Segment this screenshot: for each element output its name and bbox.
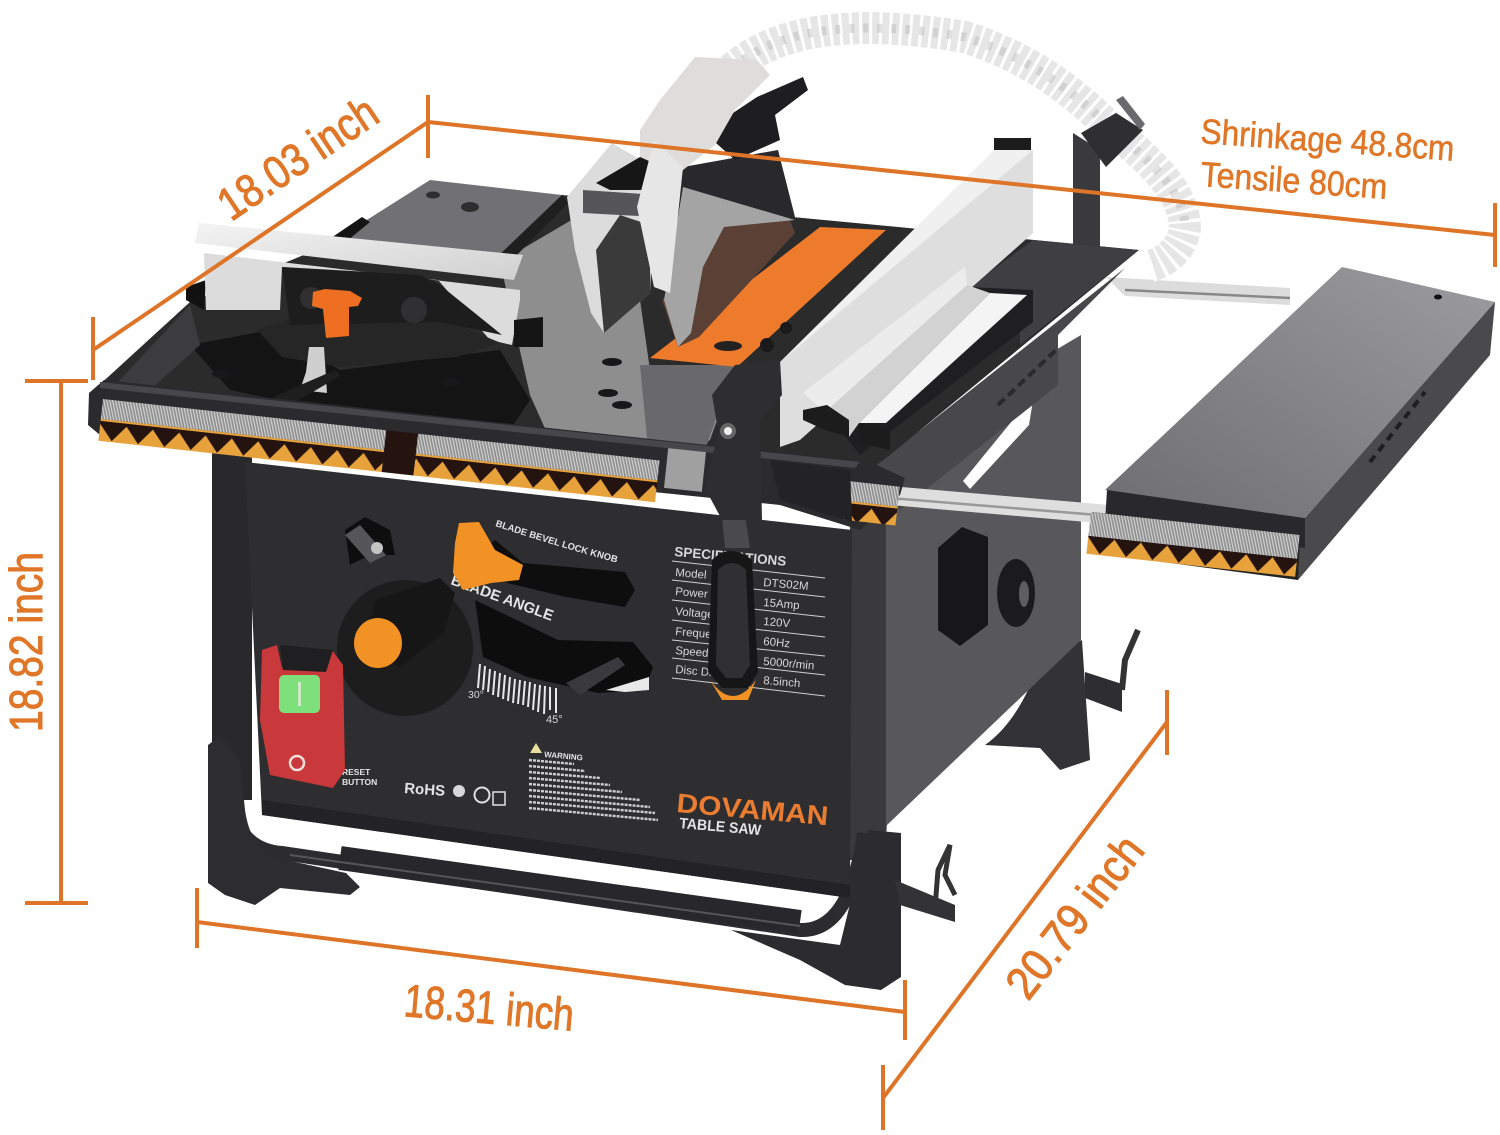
dimension: front width (197, 888, 905, 1041)
miter gauge body (257, 267, 502, 367)
side wheel (997, 559, 1035, 627)
specifications table: SPECIFICATIONS (674, 544, 787, 569)
table apron (870, 268, 1125, 510)
power switch (260, 645, 345, 788)
dimension: cord length (428, 112, 1495, 267)
table reflection (500, 215, 735, 480)
warning label (529, 743, 658, 820)
fence clamp (664, 360, 852, 522)
specifications table: 60Hz (763, 636, 791, 650)
hanging push stick (708, 515, 758, 700)
miter fence (186, 223, 543, 404)
dimension: height (0, 381, 88, 903)
RoHS marks (404, 780, 505, 805)
rip fence (780, 138, 1033, 455)
panel upper slot (470, 540, 635, 607)
front rail with ruler (88, 380, 905, 530)
ruler strip (98, 399, 660, 502)
saw blade and guard (567, 57, 808, 347)
specifications table: Voltage (675, 606, 714, 621)
dimension: depth (883, 690, 1167, 1130)
reset button label: RESET (342, 767, 371, 777)
saw feet and clips (208, 736, 955, 990)
specifications table: 15Amp (763, 597, 800, 612)
extension table (1086, 267, 1495, 580)
table holes (212, 358, 632, 409)
saw base rails (228, 790, 864, 930)
angle scale (478, 664, 556, 714)
orange throat plate (650, 227, 886, 367)
side switch block (938, 527, 988, 646)
specifications table: DTS02M (763, 577, 809, 593)
miter knob (312, 289, 362, 338)
extension front rail (1105, 490, 1305, 548)
specifications table (672, 544, 825, 696)
panel label: blade angle: BLADE ANGLE (449, 572, 556, 625)
specifications table: 120V (763, 616, 791, 630)
riving knife and rear blade (665, 150, 795, 340)
dimension: cord length: Shrinkage 48.8cm (1199, 112, 1456, 169)
front frame tubes (212, 450, 886, 860)
extension side (1298, 302, 1495, 580)
dimension: cord length: Tensile 80cm (1199, 155, 1389, 207)
angle scale 45 label: 45° (546, 714, 563, 726)
angle scale 30 label: 30° (468, 689, 484, 701)
side body of saw (870, 268, 1125, 850)
specifications table: 8.5inch (763, 675, 801, 690)
miter pointer (300, 347, 327, 393)
dimension: height: 18.82 inch (0, 552, 52, 732)
dimension: depth: 20.79 inch (995, 825, 1154, 1008)
bevel lock knob (453, 522, 523, 590)
dimension: front width: 18.31 inch (402, 974, 576, 1041)
ruler strip right of fence (844, 481, 900, 525)
front extension rod (890, 486, 1110, 524)
specifications table: Model (675, 567, 707, 582)
lower blade (662, 220, 795, 347)
specifications table: Disc Diameter (675, 664, 748, 682)
panel label: bevel knob: BLADE BEVEL LOCK KNOB (496, 520, 618, 562)
specifications table: 5000r/min (763, 656, 815, 672)
specifications table: Speed (675, 645, 709, 660)
reset button label: BUTTON (342, 777, 377, 787)
front panel (252, 462, 852, 898)
rear foot and clip (985, 630, 1138, 770)
RoHS marks: RoHS (404, 780, 446, 800)
upper clear guard (640, 57, 770, 190)
front clear guard (567, 143, 654, 333)
handwheel (337, 580, 473, 716)
reset button label (342, 767, 377, 787)
specifications table: Power (675, 586, 708, 601)
rear gray plate (328, 180, 568, 262)
product name: TABLE SAW (679, 815, 763, 839)
warning label: WARNING (544, 750, 583, 762)
extension top (1105, 267, 1495, 518)
dust hose (722, 28, 1185, 266)
hose bracket (1073, 96, 1145, 268)
specifications table: Frequency (675, 626, 730, 643)
table top (96, 195, 1139, 480)
dimension: top left width: 18.03 inch (208, 85, 387, 230)
brand: DOVAMAN (675, 788, 830, 831)
panel top left cutout (345, 517, 395, 565)
dimension: top left width (93, 85, 428, 380)
rear extension rail (1106, 277, 1290, 305)
handwheel orange cap (354, 618, 402, 668)
handwheel handle (362, 578, 455, 667)
panel blade angle slot (475, 600, 653, 693)
